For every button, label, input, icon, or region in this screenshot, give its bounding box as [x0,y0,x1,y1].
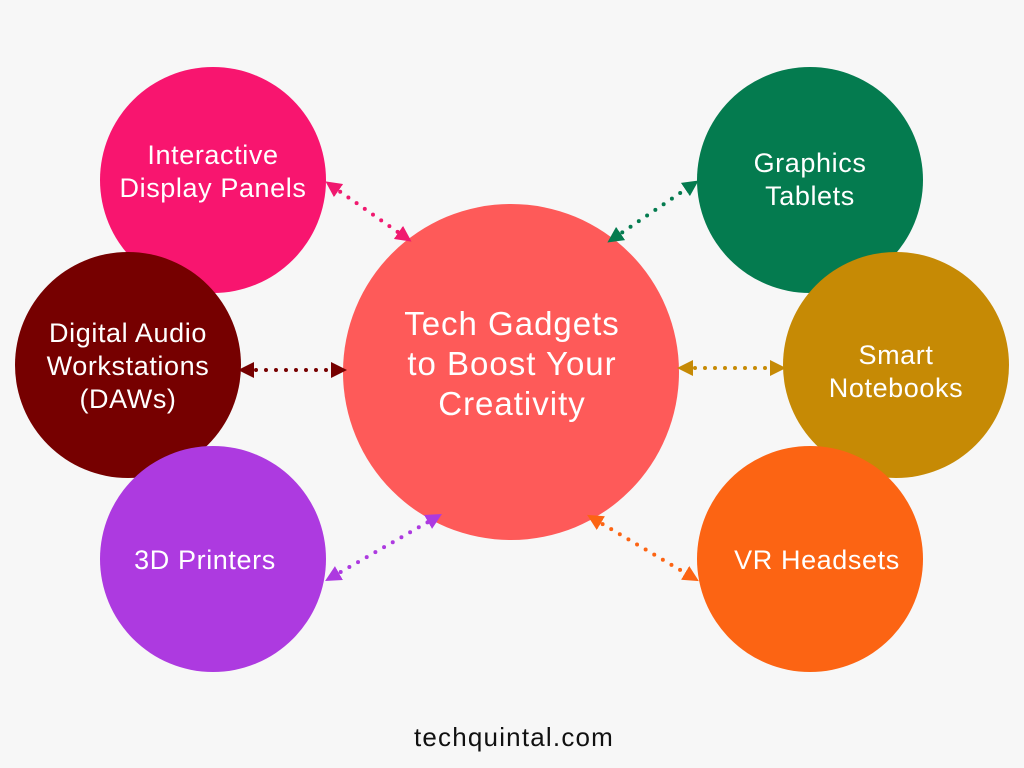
circle: interactive display panels: Interactive [147,140,279,170]
circle: VR headsets: VR Headsets [734,545,900,575]
circle: digital audio workstations: (DAWs) [79,384,177,414]
arrow: dark red [246,368,339,372]
circle: smart notebooks: Smart [858,340,934,370]
circle: graphics tablets: Graphics [754,148,866,178]
footer: website: techquintal.com [414,722,614,752]
arrow: orange [594,519,692,577]
circle: smart notebooks: Notebooks [829,373,963,403]
circle: graphics tablets [697,67,923,293]
circle: digital audio workstations [15,252,241,478]
center circle: title: Tech Gadgets [404,305,620,342]
circle: digital audio workstations: Digital Audio [49,318,207,348]
circle: smart notebooks [783,252,1009,478]
circle: 3D printers: 3D Printers [134,545,276,575]
circle: digital audio workstations: Workstations [47,351,209,381]
center circle: title: to Boost Your [407,345,617,382]
arrow: purple [332,518,435,577]
circle: 3D printers [100,446,326,672]
circle: interactive display panels: Display Panels [120,173,306,203]
circle: interactive display panels [100,67,326,293]
arrow: pink [332,186,405,237]
center circle: title: Creativity [438,385,586,422]
circle: VR headsets [697,446,923,672]
center circle: title [343,204,679,540]
arrow: gold [685,366,778,370]
circle: graphics tablets: Tablets [765,181,855,211]
arrow: green [614,185,692,238]
